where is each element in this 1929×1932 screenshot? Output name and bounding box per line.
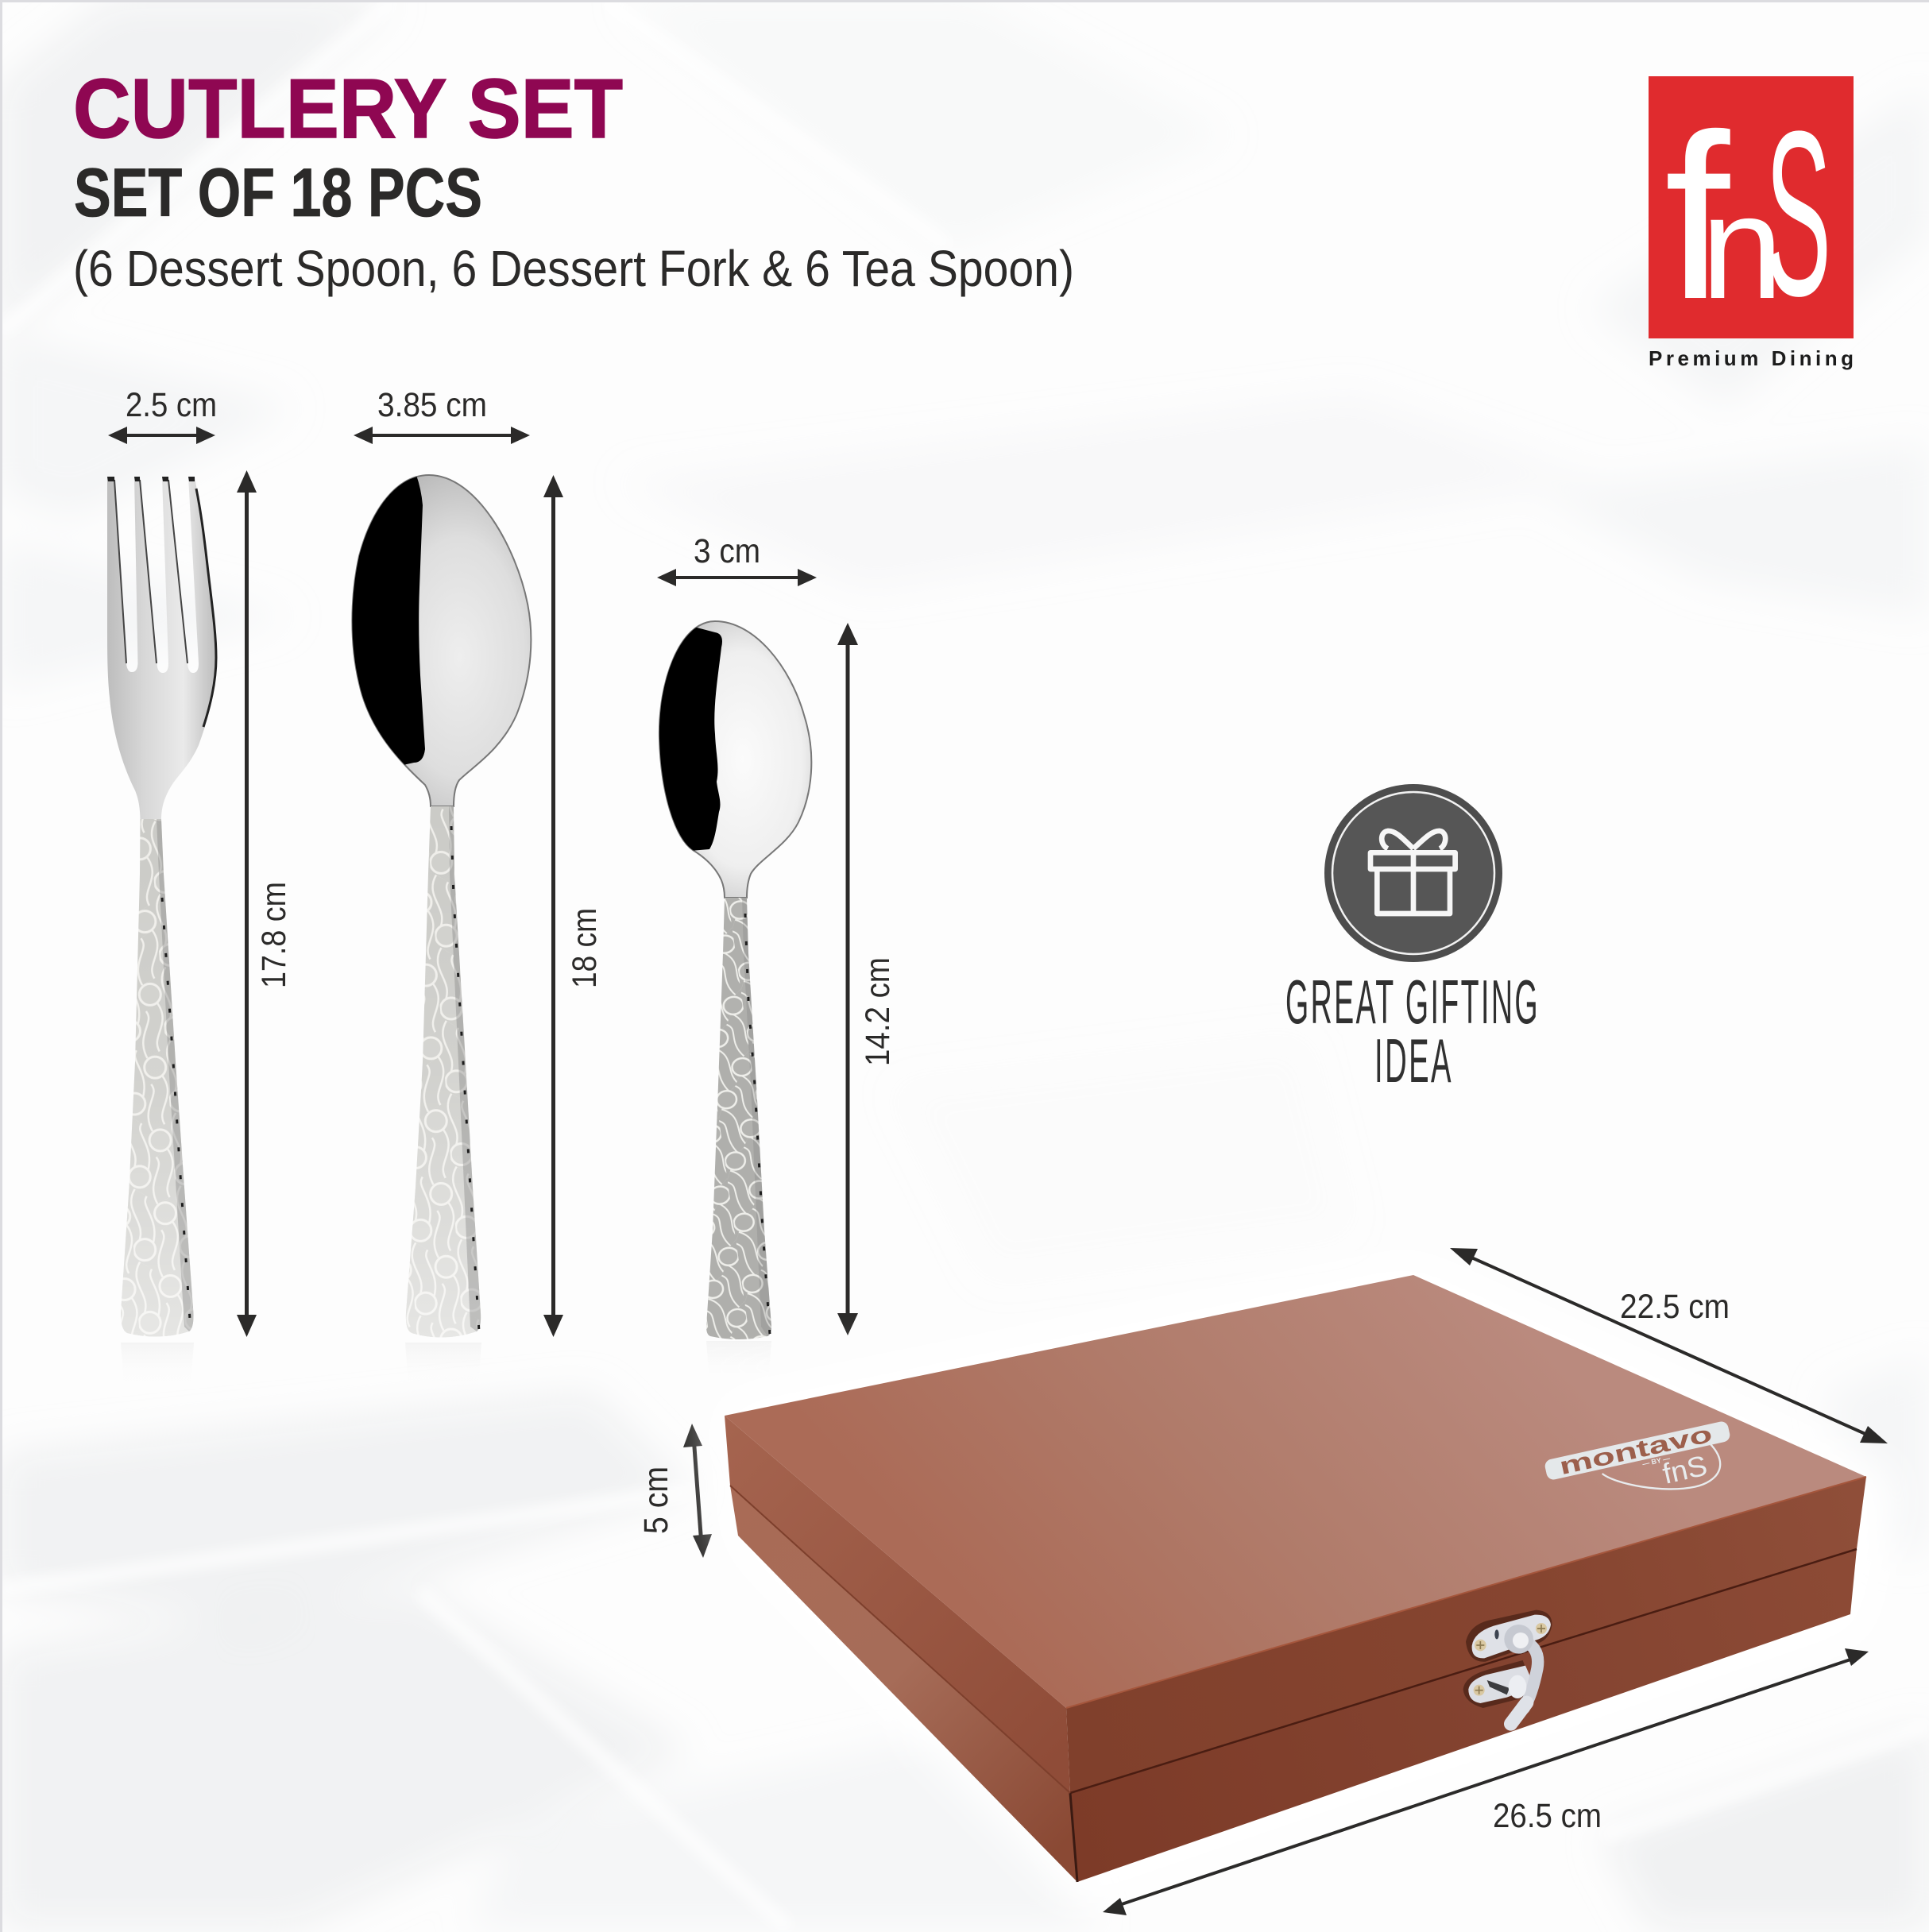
- dimension: fork width: 2.5 cm: [126, 386, 217, 424]
- fork: [107, 477, 216, 1386]
- tea spoon reflection: [659, 628, 722, 851]
- dimension: box depth: [1450, 1248, 1888, 1443]
- box lower front: [1070, 1549, 1857, 1882]
- subtitle: set of 18 pcs: SET OF 18 PCS: [74, 155, 482, 231]
- brand mark: montavo by fns: montavo: [1557, 1421, 1714, 1480]
- dimension: fork width: [108, 386, 217, 444]
- dessert spoon: [342, 469, 531, 1386]
- fork head: [107, 477, 216, 819]
- dessert spoon bowl: [352, 475, 531, 806]
- dimension: fork length: 17.8 cm: [255, 882, 293, 988]
- dimension: dessert spoon width: [354, 386, 530, 444]
- gift box: [715, 1255, 1899, 1907]
- box lid front: [1066, 1477, 1866, 1793]
- dessert spoon handle pattern: [406, 806, 481, 1338]
- dimension: box width: [1103, 1648, 1869, 1915]
- dimension: dessert spoon length: [543, 475, 604, 1337]
- brand mark: montavo by fns: [1543, 1417, 1732, 1490]
- dimension: tea spoon width: [657, 532, 817, 586]
- callout: great gifting idea: [1285, 967, 1540, 1095]
- box lid top: [725, 1275, 1866, 1708]
- description: set contents: (6 Dessert Spoon, 6 Dessert Fork & 6 Tea Spoon): [73, 240, 1074, 297]
- callout: great gifting idea: IDEA: [1374, 1026, 1453, 1095]
- brand logo: FNS: S: [1765, 83, 1831, 346]
- box lid left side: [725, 1416, 1070, 1793]
- dimension: tea spoon length: [837, 623, 897, 1335]
- dimension: box width: 26.5 cm: [1493, 1797, 1602, 1835]
- dimension: tea spoon width: 3 cm: [694, 532, 760, 570]
- fork handle pattern: [121, 819, 194, 1337]
- box lower left side: [730, 1486, 1077, 1882]
- brand logo: FNS: f: [1664, 85, 1730, 348]
- dessert spoon reflection: [352, 477, 425, 764]
- dimension: box height: [637, 1424, 712, 1558]
- dimension: box height: 5 cm: [637, 1466, 675, 1534]
- latch: [1463, 1610, 1552, 1724]
- brand logo: FNS: [1649, 76, 1854, 370]
- dimension: dessert spoon length: 18 cm: [566, 908, 604, 988]
- dimension: fork length: [237, 470, 293, 1337]
- brand logo: FNS: Premium Dining: [1649, 346, 1854, 370]
- dimension: box depth: 22.5 cm: [1620, 1288, 1730, 1326]
- brand mark: montavo by fns: — BY —: [1641, 1455, 1671, 1468]
- tea spoon handle pattern: [706, 898, 771, 1339]
- text: GREAT GIFTING: [1285, 967, 1540, 1037]
- tea spoon: [651, 616, 811, 1382]
- brand mark: montavo by fns: fnS: [1660, 1449, 1710, 1490]
- brand logo: FNS: n: [1701, 165, 1783, 330]
- gift icon badge: [1324, 784, 1502, 962]
- dimension: dessert spoon width: 3.85 cm: [377, 386, 487, 424]
- dimension: tea spoon length: 14.2 cm: [859, 957, 897, 1066]
- title: CUTLERY SET: [73, 62, 623, 156]
- tea spoon bowl: [659, 621, 811, 898]
